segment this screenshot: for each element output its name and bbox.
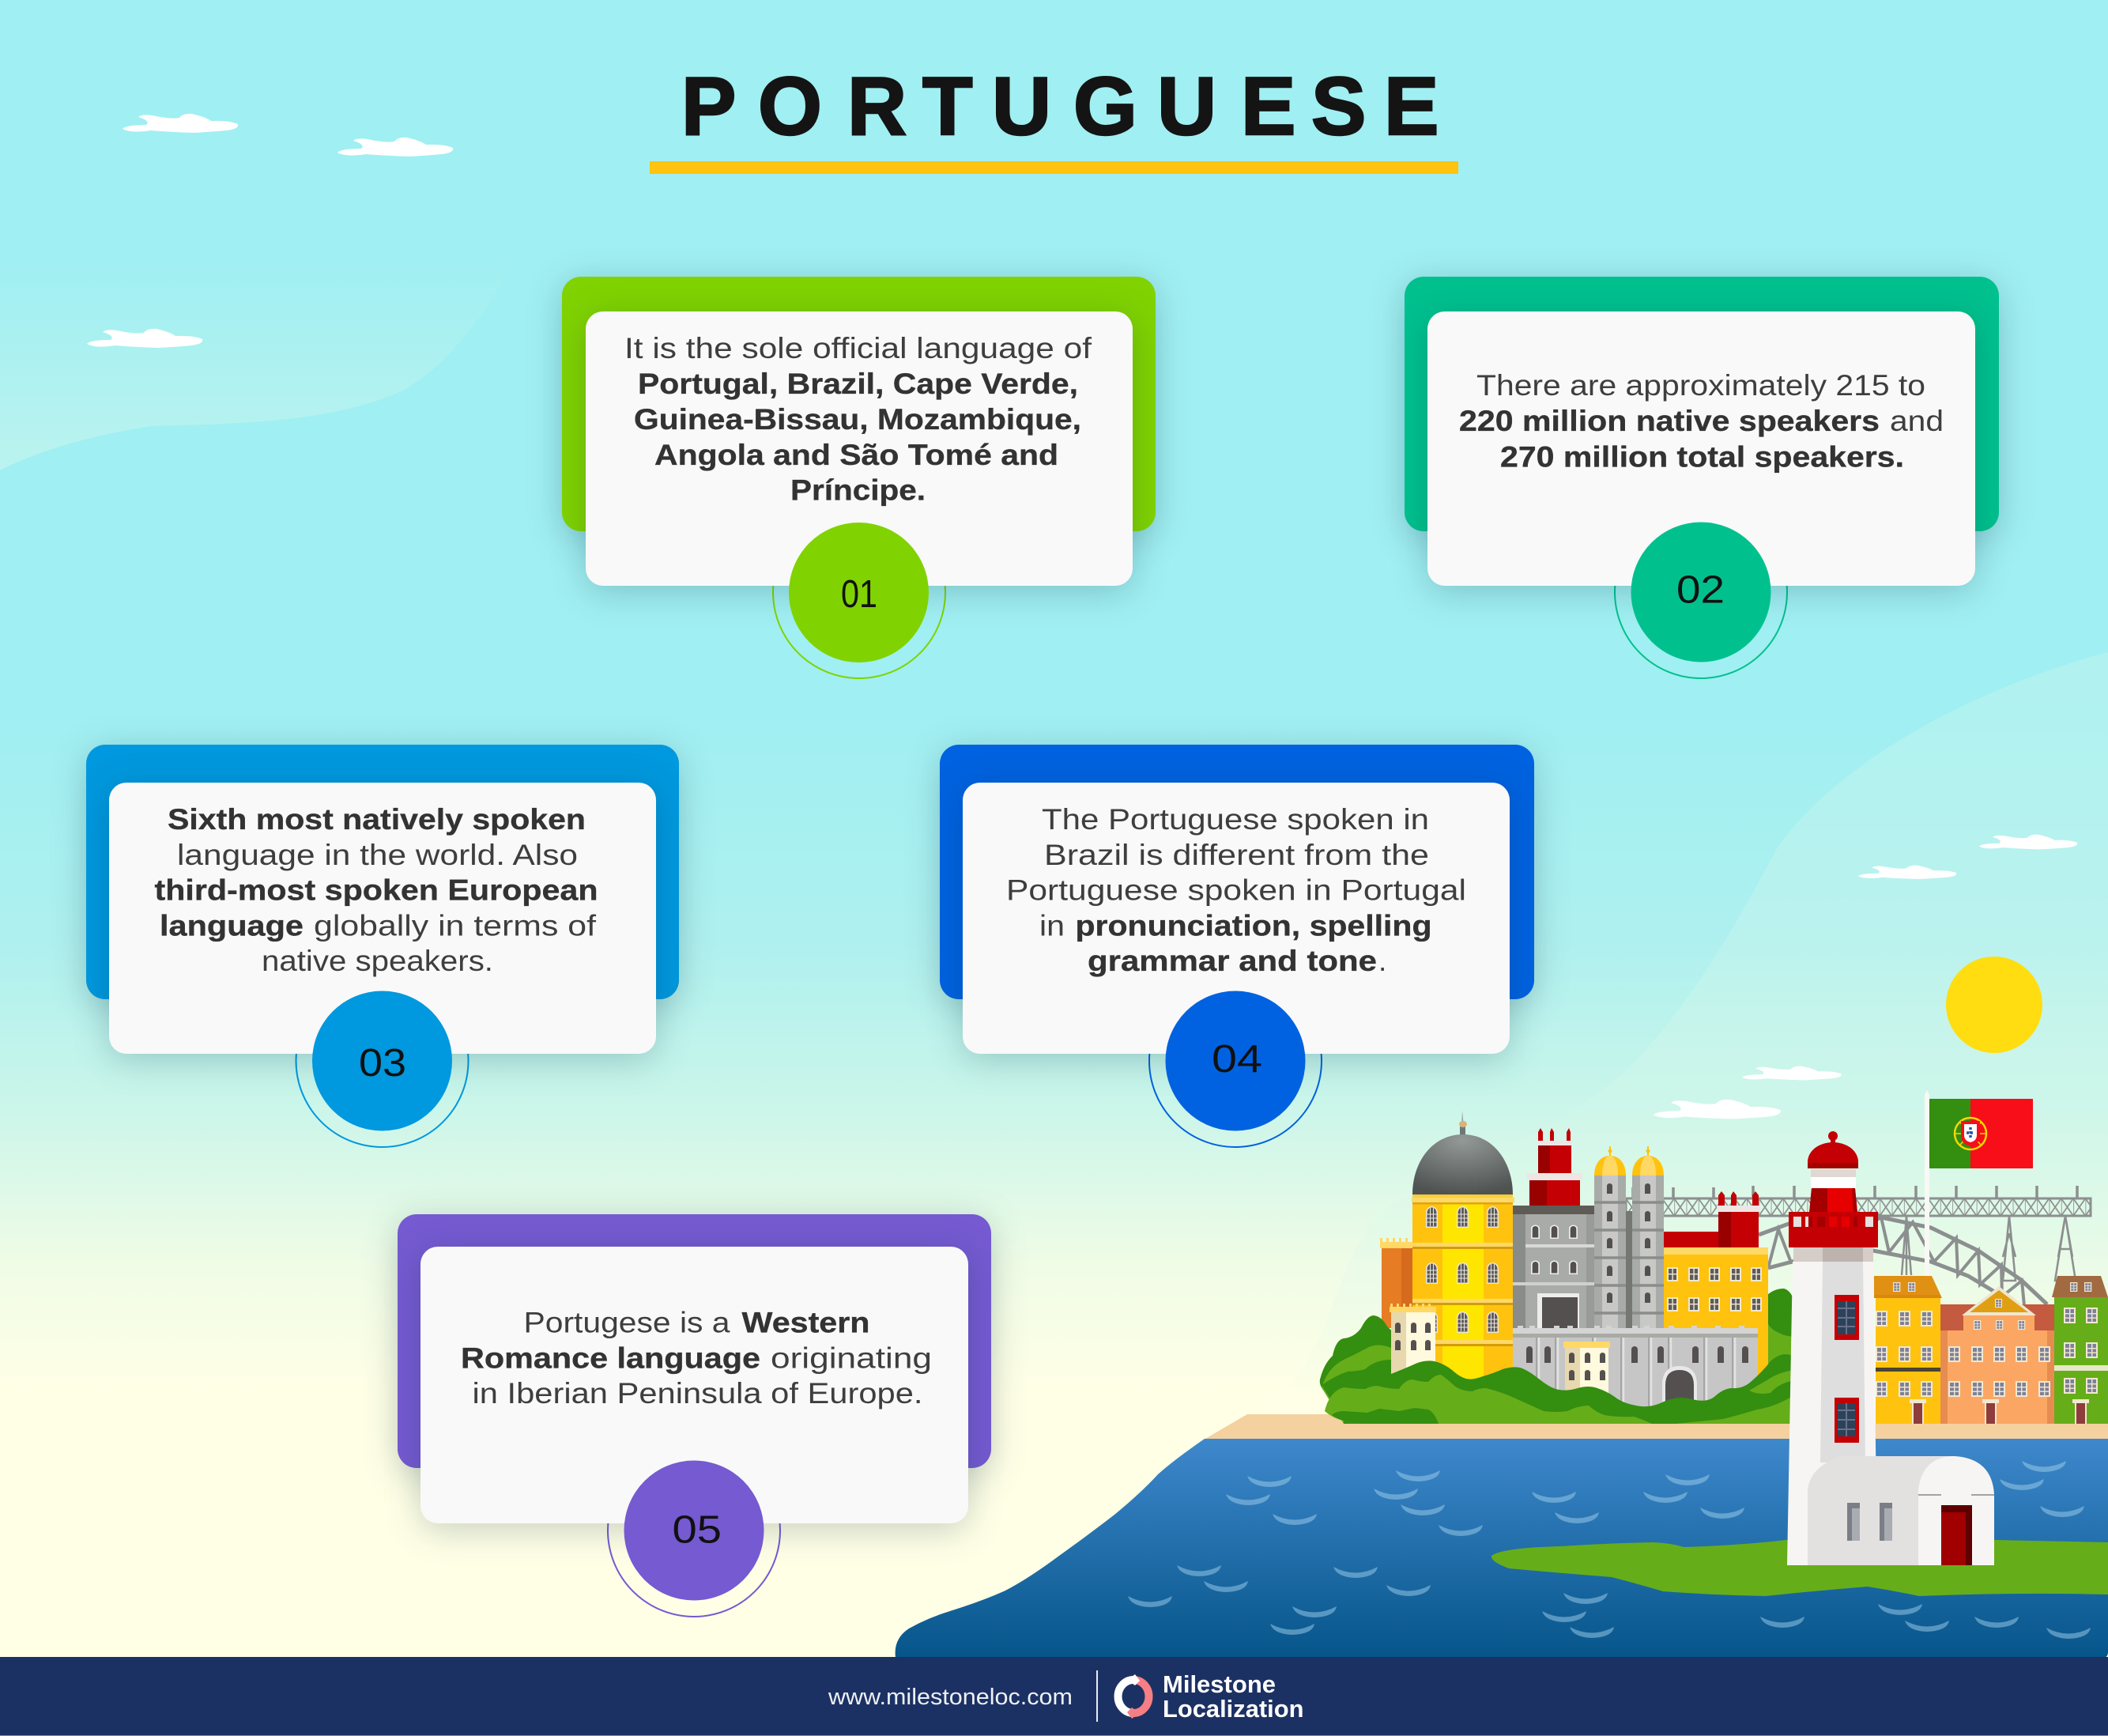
tower windows xyxy=(1835,1295,1859,1443)
yellow right block xyxy=(1664,1247,1768,1377)
coastal scene xyxy=(896,1090,2108,1658)
card 04 text: The Portuguese spoken in xyxy=(1042,803,1429,836)
title underline xyxy=(650,161,1458,174)
card 04 text: pronunciation, spelling xyxy=(1075,909,1432,942)
Portuguese flag xyxy=(1929,1099,2033,1168)
card 03 face xyxy=(109,783,656,1054)
card 05 text xyxy=(461,1306,932,1410)
grey building xyxy=(1513,1206,1594,1333)
footer xyxy=(0,1657,2108,1736)
lighthouse xyxy=(1787,1131,1994,1565)
card 03 text: language in the world. Also xyxy=(177,839,578,871)
card 04 text: in xyxy=(1039,909,1065,942)
card 04 text xyxy=(1006,803,1466,977)
card 05 ring xyxy=(608,1444,780,1617)
lighthouse annex xyxy=(1808,1456,1994,1565)
card 02 number badge: 02 xyxy=(1676,569,1725,612)
footer bar xyxy=(0,1657,2108,1735)
card 03 text: Sixth most natively spoken xyxy=(168,803,586,836)
green house xyxy=(2052,1276,2108,1424)
yellow dome tower xyxy=(1412,1194,1514,1383)
card 02 text: 270 million total speakers. xyxy=(1500,441,1904,473)
card 01 text: Angola and São Tomé and xyxy=(654,439,1058,471)
card 01 text: Portugal, Brazil, Cape Verde, xyxy=(638,368,1078,400)
card 05 number badge xyxy=(624,1461,764,1600)
card 02 text: and xyxy=(1890,405,1944,437)
card 05 number badge: 05 xyxy=(672,1508,722,1551)
card 02 ring xyxy=(1615,506,1787,678)
card 03 text: language xyxy=(160,909,304,942)
card 01 text xyxy=(624,332,1092,506)
footer brand name: Localization xyxy=(1163,1695,1304,1723)
card 03 text xyxy=(155,803,598,977)
card 03 text: native speakers. xyxy=(262,945,493,977)
card 04 number badge xyxy=(1165,991,1306,1130)
red turret right xyxy=(1664,1191,1760,1247)
lighthouse tower xyxy=(1787,1262,1877,1565)
card 03 text: third-most spoken European xyxy=(155,874,598,906)
panel: card 02 xyxy=(1405,277,1999,678)
grey dome xyxy=(1412,1111,1513,1194)
ripples xyxy=(1128,1461,2091,1639)
card 04 text: grammar and tone xyxy=(1088,945,1377,977)
right background wave xyxy=(1269,652,2108,1423)
card 02 text: 220 million native speakers xyxy=(1459,405,1880,437)
card 01 ring xyxy=(773,506,945,678)
card 05 text: originating xyxy=(771,1342,932,1374)
card 03 number badge xyxy=(312,991,452,1130)
panel: card 03 xyxy=(86,745,679,1147)
island xyxy=(1491,1540,2108,1596)
card 02 text: There are approximately 215 to xyxy=(1476,369,1925,402)
card 02 number badge xyxy=(1631,522,1770,662)
card 01 backing xyxy=(562,277,1156,531)
card 04 backing xyxy=(940,745,1534,999)
panel: card 01 xyxy=(562,277,1156,678)
flag pole xyxy=(1925,1090,1929,1296)
card 05 text: Portugese is a xyxy=(523,1306,730,1339)
card 01 number badge: 01 xyxy=(841,573,877,616)
lighthouse collar xyxy=(1793,1247,1873,1262)
card 03 number badge: 03 xyxy=(359,1042,406,1085)
card 04 text: Portuguese spoken in Portugal xyxy=(1006,874,1466,906)
foliage behind the palace right xyxy=(1763,1289,1794,1424)
top-left background wave xyxy=(0,259,514,470)
sand xyxy=(1205,1414,2108,1439)
card 04 text: Brazil is different from the xyxy=(1044,839,1429,871)
card 04 number badge: 04 xyxy=(1212,1038,1262,1081)
footer brand name: Milestone xyxy=(1163,1670,1276,1698)
card 04 ring xyxy=(1149,975,1322,1147)
red turret centre xyxy=(1527,1128,1582,1206)
footer website: www.milestoneloc.com xyxy=(828,1685,1073,1710)
card 03 backing xyxy=(86,745,679,999)
foliage front xyxy=(1325,1354,1794,1424)
card 02 backing xyxy=(1405,277,1999,531)
card 01 text: Príncipe. xyxy=(790,474,926,506)
card 01 face xyxy=(586,311,1133,586)
card 01 number badge xyxy=(789,523,929,662)
castle wall xyxy=(1513,1326,1758,1415)
twin towers xyxy=(1594,1146,1664,1330)
card 05 backing xyxy=(398,1214,991,1468)
panel: card 04 xyxy=(940,745,1534,1147)
title: PORTUGUESE xyxy=(681,61,1439,153)
clouds xyxy=(87,114,2077,1119)
lighthouse cap xyxy=(1808,1131,1858,1168)
card 05 text: in Iberian Peninsula of Europe. xyxy=(473,1377,923,1410)
sea xyxy=(896,1439,2108,1658)
card 03 ring xyxy=(296,975,468,1147)
lantern room xyxy=(1809,1169,1857,1213)
bridge xyxy=(1626,1186,2091,1314)
foliage back left xyxy=(1320,1315,1415,1424)
small cream building left xyxy=(1390,1304,1436,1379)
footer bottom edge xyxy=(0,1735,2108,1736)
card 05 text: Romance language xyxy=(461,1342,760,1374)
panel: card 05 xyxy=(398,1214,991,1617)
yellow house xyxy=(1874,1276,1942,1424)
card 04 text: . xyxy=(1378,945,1386,977)
footer divider xyxy=(1096,1670,1098,1722)
card 05 text: Western xyxy=(741,1306,869,1339)
footer brand name xyxy=(1163,1670,1304,1723)
card 02 text xyxy=(1459,369,1944,473)
small cream building centre xyxy=(1563,1342,1610,1394)
orange house xyxy=(1940,1286,2054,1424)
card 04 face xyxy=(963,783,1510,1054)
card 03 text: globally in terms of xyxy=(314,909,597,942)
card 01 text: Guinea-Bissau, Mozambique, xyxy=(634,403,1081,436)
card 05 face xyxy=(420,1247,968,1523)
gallery xyxy=(1789,1212,1878,1247)
sun xyxy=(1946,957,2042,1053)
icon: Milestone logo xyxy=(1118,1674,1149,1719)
card 02 face xyxy=(1427,311,1975,586)
card 01 text: It is the sole official language of xyxy=(624,332,1092,364)
orange tower xyxy=(1380,1238,1412,1328)
Pena palace xyxy=(1380,1111,1768,1415)
